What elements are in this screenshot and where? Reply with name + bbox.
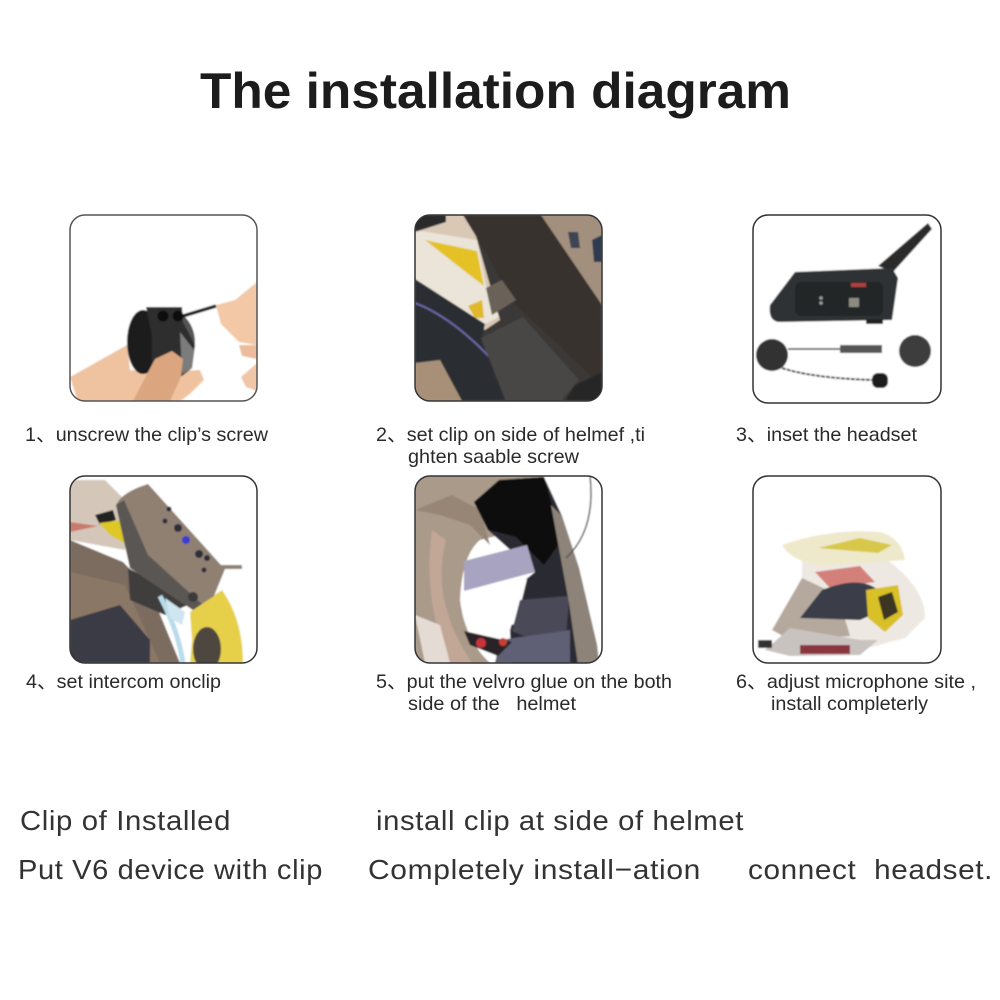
caption: step 2 [376, 424, 645, 468]
caption: step 1: 1、unscrew the clip’s screw [25, 424, 269, 446]
caption: step 5 [376, 671, 672, 715]
panel: step 6 photo [753, 476, 941, 663]
caption: step 2: 2、set clip on side of helmef ,ti [376, 424, 645, 446]
caption: step 5: 5、put the velvro glue on the both [376, 671, 672, 693]
caption: step 4: 4、set intercom onclip [26, 671, 221, 693]
caption: step 6 [736, 671, 976, 715]
panel: step 1 photo [70, 215, 257, 412]
note: clip of installed: Clip of Installed [20, 805, 231, 836]
caption: step 6: 6、adjust microphone site , [736, 671, 976, 693]
note: install clip: install clip at side of helmet [376, 805, 744, 836]
note: put V6 device: Put V6 device with clip [18, 854, 323, 885]
panel: step 3 photo [753, 215, 941, 403]
caption: step 6: install completerly [771, 693, 928, 715]
panel: step 2 photo [415, 215, 602, 412]
title: The installation diagram [200, 63, 791, 119]
panel: step 5 photo [415, 476, 602, 672]
note: connect headset: connect headset. [748, 854, 993, 885]
note: completely install-ation: Completely install−ation [368, 854, 701, 885]
caption: step 2: ghten saable screw [408, 446, 580, 468]
panel: step 4 photo [70, 476, 257, 671]
caption: step 5: side of the helmet [408, 693, 577, 715]
caption: step 3: 3、inset the headset [736, 424, 918, 446]
